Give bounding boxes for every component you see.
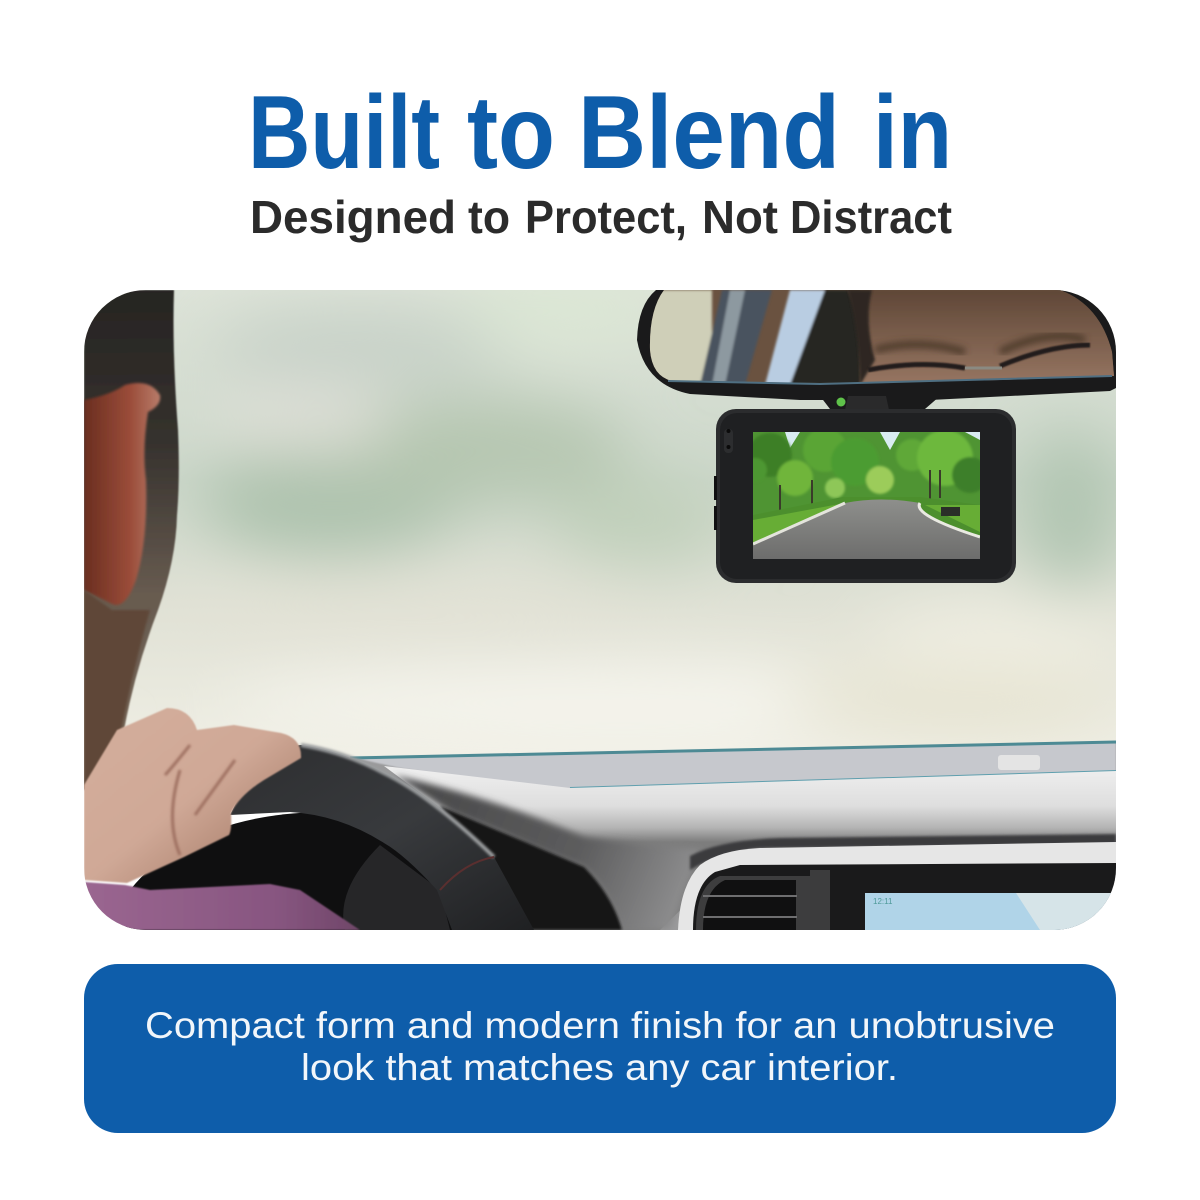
caption text: Compact form and modern finish for an unobtrusive bbox=[145, 1005, 1055, 1046]
subtitle: Designed bbox=[250, 191, 456, 243]
console and air vent bbox=[678, 842, 1116, 930]
subtitle: Protect, bbox=[525, 191, 687, 243]
subtitle: Not bbox=[702, 191, 778, 243]
photo: driver view through windshield bbox=[84, 280, 1130, 930]
driver head bbox=[84, 290, 179, 790]
driver hand bbox=[84, 708, 301, 883]
title: Built bbox=[248, 75, 440, 191]
subtitle bbox=[250, 191, 952, 243]
caption text: look that matches any car interior. bbox=[301, 1047, 898, 1088]
console and air vent: 12:11 bbox=[873, 897, 893, 906]
dark lower dash bbox=[440, 806, 622, 930]
upper tray bbox=[360, 744, 1116, 788]
upper dash bbox=[384, 766, 1116, 930]
blurred road scene bbox=[84, 280, 1130, 770]
dash camera bbox=[714, 409, 1016, 583]
textured dash shoulder bbox=[394, 775, 700, 930]
infotainment screen bbox=[865, 893, 1116, 930]
title: to bbox=[467, 75, 555, 191]
dashboard bbox=[340, 742, 1116, 930]
camera screen: tree-lined road bbox=[753, 432, 980, 559]
subtitle: Distract bbox=[790, 191, 952, 243]
title: Blend bbox=[578, 75, 840, 191]
caption text bbox=[145, 1005, 1055, 1088]
caption panel bbox=[84, 964, 1116, 1133]
steering wheel bbox=[125, 745, 534, 930]
subtitle: to bbox=[468, 191, 510, 243]
title bbox=[248, 75, 952, 191]
driver sleeve bbox=[84, 882, 360, 930]
mirror mount bbox=[823, 400, 936, 409]
title: in bbox=[873, 75, 952, 191]
rearview mirror bbox=[637, 290, 1120, 410]
driver reflection bbox=[848, 290, 1114, 382]
